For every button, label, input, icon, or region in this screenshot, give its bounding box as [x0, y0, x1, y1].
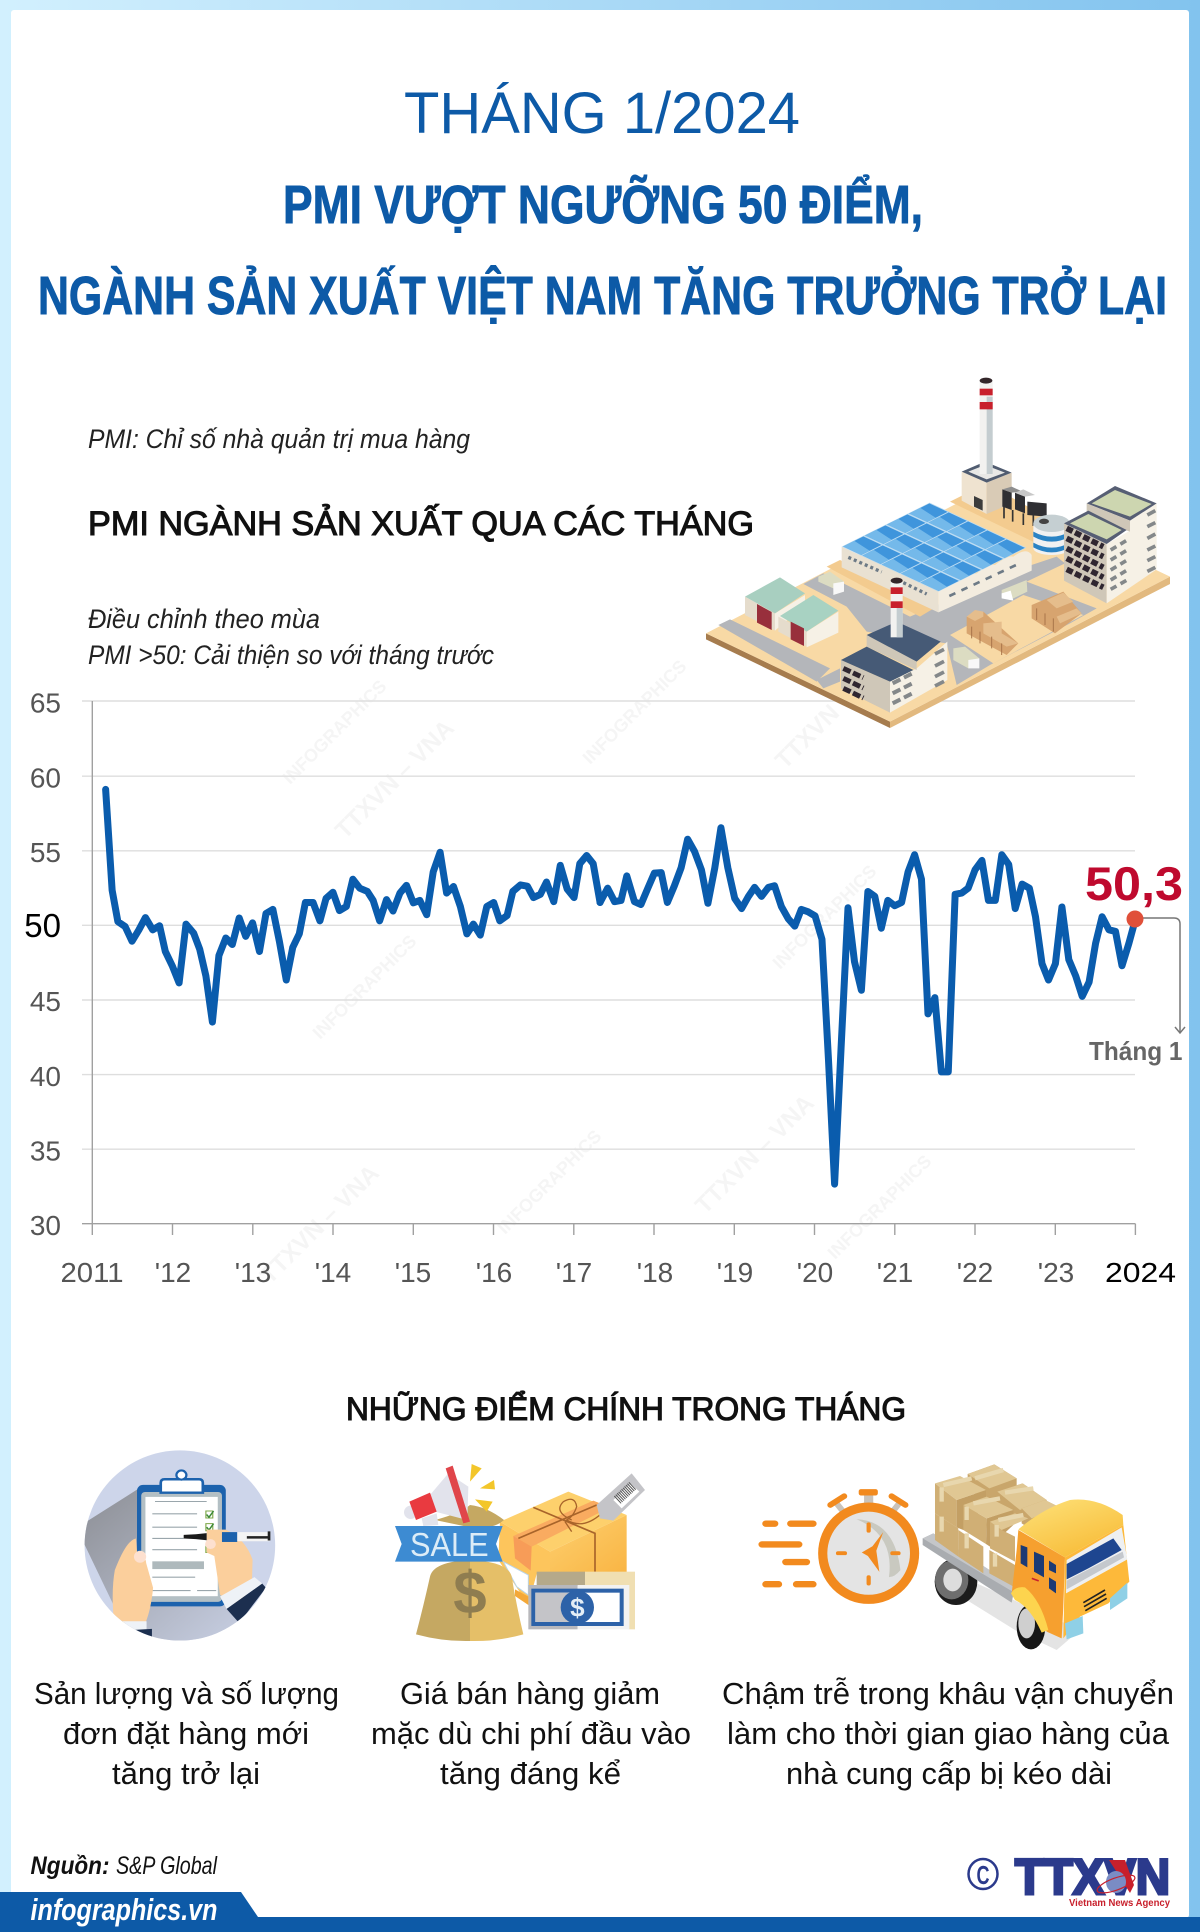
money bag: $ [453, 1559, 487, 1626]
line chart: manufacturing PMI: '16 [476, 1257, 512, 1288]
takeaway text: output and orders: đơn đặt hàng mới [63, 1716, 309, 1751]
line chart: manufacturing PMI: '19 [717, 1257, 753, 1288]
takeaway text: output and orders: Sản lượng và số lượng [34, 1676, 339, 1711]
line chart: manufacturing PMI: '12 [155, 1257, 191, 1288]
callout: January value: Tháng 1 [1089, 1036, 1182, 1066]
icon: stopwatch [762, 1489, 919, 1604]
callout: January value: 50,3 [1085, 857, 1183, 910]
line chart: manufacturing PMI: '13 [235, 1257, 271, 1288]
title: THÁNG 1/2024 [404, 81, 800, 146]
ticket [503, 1562, 528, 1605]
line chart: manufacturing PMI: INFOGRAPHICS [309, 931, 420, 1043]
storage tank [1033, 515, 1070, 555]
line chart: manufacturing PMI: '22 [957, 1257, 993, 1288]
section heading: NHỮNG ĐIỂM CHÍNH TRONG THÁNG [346, 1391, 906, 1427]
callout: January value [1085, 857, 1185, 1066]
chart notes: PMI >50: Cải thiện so với tháng trước [88, 640, 494, 670]
line chart: manufacturing PMI: INFOGRAPHICS [824, 1151, 935, 1263]
footer band [0, 1892, 1200, 1932]
line chart: manufacturing PMI [24, 645, 1176, 1289]
sale banner: SALE [410, 1527, 489, 1564]
line chart: manufacturing PMI: TTXVN – VNA [255, 1160, 385, 1289]
title: PMI VƯỢT NGƯỠNG 50 ĐIỂM, [283, 175, 923, 235]
line chart: manufacturing PMI: '14 [315, 1257, 351, 1288]
boxes [935, 1464, 1058, 1587]
logo: TTXVN [968, 1849, 1170, 1909]
icon: clipboard and hands [77, 1450, 275, 1648]
line chart: manufacturing PMI: 45 [30, 986, 61, 1017]
line chart: manufacturing PMI: 2024 [1105, 1257, 1176, 1288]
gift box [498, 1492, 627, 1605]
line chart: manufacturing PMI: 65 [30, 688, 61, 719]
logo: TTXVN: C [976, 1860, 990, 1890]
line chart: manufacturing PMI: TTXVN – VNA [770, 645, 900, 774]
big chimney block [962, 378, 1012, 514]
line chart: manufacturing PMI: '20 [797, 1257, 833, 1288]
money bag [416, 1505, 523, 1641]
warehouse [842, 503, 1032, 612]
line chart: manufacturing PMI: INFOGRAPHICS [494, 1126, 605, 1238]
logo: TTXVN: TTXVN [1015, 1849, 1170, 1905]
title [38, 81, 1167, 326]
line chart: manufacturing PMI: TTXVN – VNA [330, 715, 460, 844]
takeaway text: selling prices [371, 1676, 691, 1791]
icon: sale bag, box, money [395, 1464, 645, 1641]
source [30, 1852, 218, 1880]
line chart: manufacturing PMI: '15 [395, 1257, 431, 1288]
takeaway text: selling prices: tăng đáng kể [440, 1756, 621, 1791]
takeaway text: delivery delays: làm cho thời gian giao hàng của [727, 1716, 1170, 1751]
crates [967, 592, 1082, 655]
line chart: manufacturing PMI: 35 [30, 1136, 61, 1166]
cab [1011, 1499, 1129, 1639]
line chart: manufacturing PMI: 60 [30, 762, 61, 794]
icon: delivery truck [923, 1464, 1129, 1650]
takeaway text: delivery delays: nhà cung cấp bị kéo dài [786, 1756, 1112, 1791]
takeaway text: delivery delays [722, 1676, 1174, 1791]
price tag [597, 1473, 645, 1521]
line chart: manufacturing PMI: '23 [1038, 1257, 1074, 1288]
chart notes: Điều chỉnh theo mùa [88, 604, 320, 634]
front building [841, 578, 947, 713]
line chart: manufacturing PMI: 40 [30, 1061, 61, 1092]
office tower [1064, 486, 1157, 603]
line chart: manufacturing PMI: '21 [877, 1257, 913, 1288]
line chart: manufacturing PMI: '18 [637, 1257, 673, 1288]
line chart: manufacturing PMI: '17 [556, 1257, 592, 1288]
footer band: infographics.vn [30, 1892, 218, 1927]
takeaway text: selling prices: Giá bán hàng giảm [400, 1676, 660, 1711]
line chart: manufacturing PMI: 50 [24, 907, 61, 944]
chart notes [88, 604, 494, 670]
icon: isometric factory [706, 378, 1170, 728]
line chart: manufacturing PMI: 2011 [60, 1257, 124, 1288]
line chart: manufacturing PMI: 30 [30, 1210, 61, 1241]
banknotes: $ [570, 1593, 585, 1623]
logo: TTXVN: Vietnam News Agency [1069, 1897, 1170, 1909]
takeaway text: output and orders: tăng trở lại [112, 1756, 260, 1791]
line chart: manufacturing PMI: TTXVN – VNA [690, 1090, 820, 1219]
line chart: manufacturing PMI: INFOGRAPHICS [769, 861, 880, 973]
line chart: manufacturing PMI: INFOGRAPHICS [579, 656, 690, 768]
takeaway text: selling prices: mặc dù chi phí đầu vào [371, 1716, 691, 1751]
source: S&P Global [116, 1852, 218, 1880]
banknotes [528, 1572, 635, 1629]
line chart: manufacturing PMI: 55 [30, 837, 61, 868]
takeaway text: delivery delays: Chậm trễ trong khâu vận chuyển [722, 1676, 1174, 1711]
line chart: manufacturing PMI: INFOGRAPHICS [279, 676, 390, 788]
source: Nguồn: [30, 1852, 110, 1880]
takeaway text: output and orders [34, 1676, 339, 1791]
definition note: PMI: Chỉ số nhà quản trị mua hàng [88, 424, 470, 454]
small trucks [818, 572, 1027, 668]
green sheds [745, 577, 838, 647]
megaphone [404, 1464, 495, 1526]
chart heading: PMI NGÀNH SẢN XUẤT QUA CÁC THÁNG [88, 505, 754, 543]
